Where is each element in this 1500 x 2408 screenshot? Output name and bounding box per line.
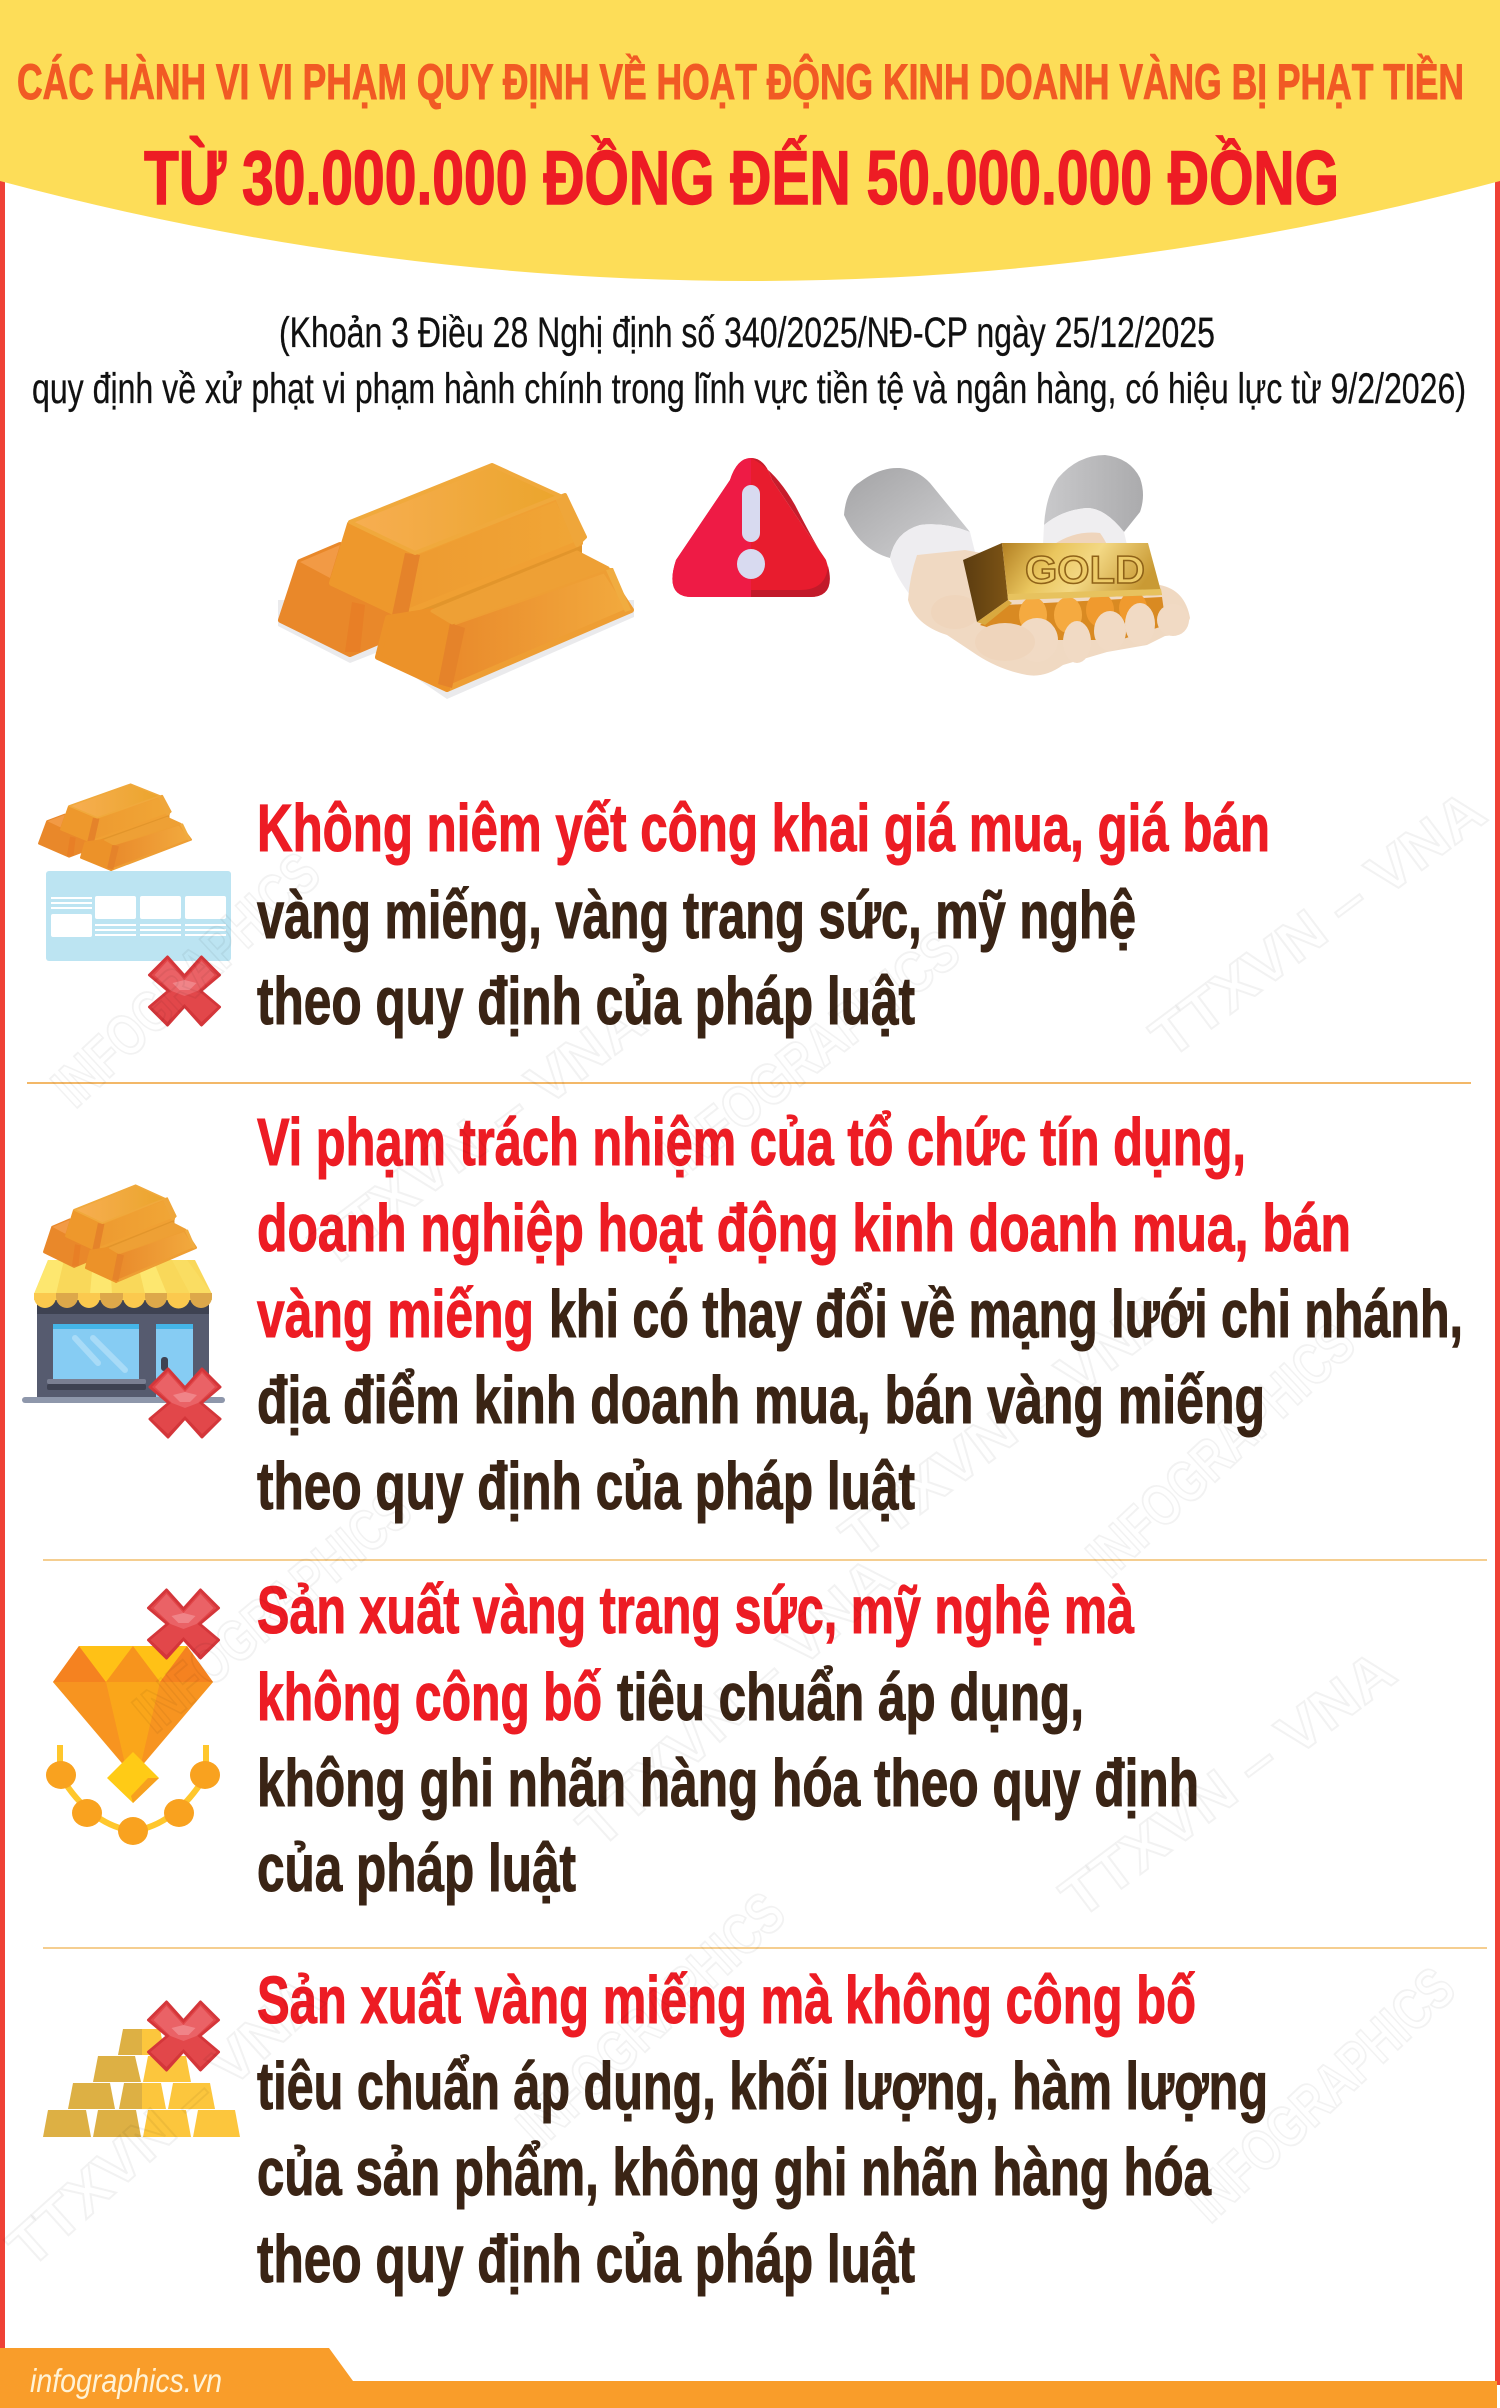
panel: violation 3 text: không ghi nhãn hàng hóa theo quy định xyxy=(257,1746,1199,1821)
panel: violation 1 text: vàng miếng, vàng trang sức, mỹ nghệ xyxy=(257,878,1136,953)
watermark: TTXVN – VNA xyxy=(829,1278,1187,1570)
footer band xyxy=(0,2348,1497,2408)
watermark xyxy=(0,778,1497,2280)
icon: hands holding gold bar xyxy=(844,455,1190,676)
panel: violation 3 text: tiêu chuẩn áp dụng, xyxy=(617,1660,1084,1735)
watermark: TTXVN – VNA xyxy=(0,1964,336,2280)
watermark: INFOGRAPHICS xyxy=(122,1477,424,1745)
watermark: TTXVN – VNA xyxy=(1049,1638,1407,1930)
watermark: INFOGRAPHICS xyxy=(648,917,972,1190)
watermark: INFOGRAPHICS xyxy=(505,1880,798,2160)
yellow header shape xyxy=(0,0,1500,281)
panel: violation 3 text: Sản xuất vàng trang sức, mỹ nghệ mà xyxy=(257,1573,1135,1648)
panel: violation 1 text: theo quy định của pháp luật xyxy=(257,964,915,1039)
panel: violation 3 text xyxy=(257,1573,1199,1906)
legal reference subtitle xyxy=(32,309,1466,413)
red left border xyxy=(0,175,5,2350)
panel: violation 3 text: không công bố xyxy=(257,1660,602,1735)
panel: violation 4 icon xyxy=(43,2002,240,2137)
panel: violation 2 icon xyxy=(22,1185,225,1437)
legal reference subtitle: (Khoản 3 Điều 28 Nghị định số 340/2025/NĐ-CP ngày 25/12/2025 xyxy=(279,309,1215,357)
panel: violation 3 icon xyxy=(46,1590,220,1845)
panel: violation 2 text: vàng miếng xyxy=(257,1277,534,1352)
panel: violation 3 text: của pháp luật xyxy=(257,1831,576,1906)
panel: violation 2 text xyxy=(257,1105,1463,1524)
watermark: TTXVN – VNA xyxy=(565,1544,906,1860)
title xyxy=(17,53,1464,221)
watermark: INFOGRAPHICS xyxy=(1075,1310,1368,1590)
icon: gold bars xyxy=(278,465,634,699)
watermark: INFOGRAPHICS xyxy=(40,840,333,1120)
panel: violation 1 icon xyxy=(39,784,231,1025)
label: GOLD stamped text: GOLD xyxy=(1025,549,1145,592)
watermark: TTXVN – VNA xyxy=(1139,778,1497,1070)
red right border xyxy=(1495,175,1500,2385)
footer site name: infographics.vn xyxy=(30,2362,222,2399)
panel: violation 4 text: theo quy định của pháp luật xyxy=(257,2222,915,2297)
panel: violation 2 text: theo quy định của pháp luật xyxy=(257,1449,915,1524)
icon: warning triangle xyxy=(672,458,830,597)
watermark: TTXVN – VNA xyxy=(299,988,657,1280)
panel: violation 4 text xyxy=(257,1963,1268,2297)
panel: violation 1 text xyxy=(257,791,1270,1039)
